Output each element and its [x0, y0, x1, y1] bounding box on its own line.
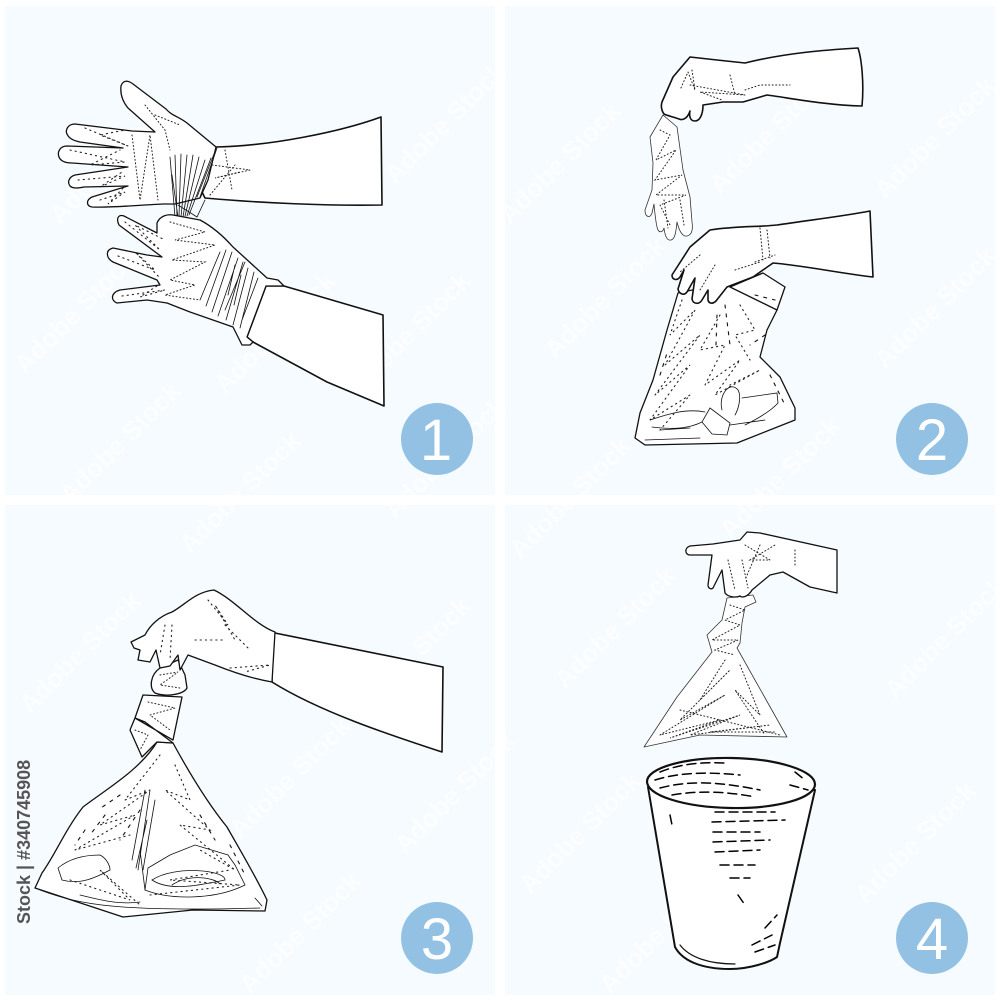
bag stipple	[70, 755, 240, 905]
lower glove hand	[107, 215, 284, 345]
illustration: step 1 gloved hands	[58, 81, 473, 475]
stock watermark pattern: Adobe Stock	[208, 265, 342, 399]
hanging glove	[645, 115, 692, 240]
stock watermark pattern: Adobe Stock	[703, 65, 837, 199]
step number 3 badge: 3	[421, 907, 453, 972]
stock watermark pattern: Adobe Stock	[378, 55, 512, 189]
arm	[270, 632, 443, 752]
knot stipple	[135, 702, 175, 750]
stock watermark pattern: Adobe Stock	[223, 710, 357, 844]
stock watermark pattern: Adobe Stock	[503, 430, 637, 564]
stock watermark pattern: Adobe Stock	[343, 590, 477, 724]
step number 1 badge: 1	[420, 408, 452, 473]
bucket	[647, 757, 815, 969]
bucket inside shading	[655, 763, 808, 797]
stretched glove cuff pleats	[170, 148, 217, 217]
step number 2 badge	[896, 403, 968, 475]
neck stipple	[160, 672, 180, 688]
top arm and hand	[661, 48, 863, 121]
bucket rim	[647, 757, 815, 809]
panel: step 1 background	[5, 6, 495, 495]
hand details	[160, 600, 270, 672]
bucket base line	[680, 945, 735, 964]
forearm stipple	[210, 150, 250, 195]
stock watermark pattern: Adobe Stock	[13, 585, 147, 719]
top hand details	[680, 70, 790, 100]
lower hand details	[680, 228, 775, 290]
panel: step 4 background	[505, 505, 995, 995]
bag stipple	[660, 605, 780, 738]
stock watermark pattern: Adobe Stock	[848, 775, 982, 909]
hanging glove stipple	[655, 130, 686, 228]
step number 4 badge: 4	[916, 907, 948, 972]
upper arm sleeve	[196, 117, 382, 205]
bag folds	[132, 790, 155, 890]
bag base line	[40, 890, 262, 909]
stock watermark pattern: Adobe Stock	[868, 70, 1000, 204]
lower arm and hand	[672, 211, 873, 303]
stock watermark pattern: Adobe Stock	[53, 375, 187, 509]
arm and hand with pointing finger	[686, 532, 837, 597]
upper glove hand	[58, 81, 216, 207]
bag short strokes	[660, 295, 785, 405]
stock watermark pattern: Adobe Stock	[513, 765, 647, 899]
step number 4 badge	[896, 902, 968, 974]
step number 3 badge	[401, 902, 473, 974]
stock watermark pattern: Adobe Stock	[538, 230, 672, 364]
stock watermark pattern: Adobe Stock	[43, 95, 177, 229]
hand	[131, 590, 275, 682]
stock watermark pattern: Adobe Stock	[593, 865, 727, 999]
illustration: step 2 hands and bag	[635, 48, 968, 475]
stock watermark pattern: Adobe Stock	[378, 390, 512, 524]
step number 1 badge	[401, 403, 473, 475]
bag	[635, 280, 795, 445]
palm stipple	[132, 105, 180, 200]
upper glove stipple	[70, 128, 128, 204]
step number 2 badge: 2	[916, 408, 948, 473]
stock watermark pattern: Adobe Stock	[343, 265, 477, 399]
gloves inside bag	[645, 387, 778, 440]
bag stipple	[650, 300, 760, 430]
bag cuff	[730, 273, 785, 310]
lower glove wrinkles	[200, 250, 258, 328]
panel: step 2 background	[505, 6, 995, 495]
bucket body	[648, 787, 815, 969]
stock watermark pattern: Adobe Stock	[713, 410, 847, 544]
bucket base shading	[752, 915, 777, 952]
bag twist knot	[130, 695, 182, 757]
bag	[644, 595, 787, 747]
stock watermark pattern: Adobe Stock	[173, 425, 307, 559]
bag body	[35, 742, 267, 917]
hand details	[728, 545, 795, 590]
stock watermark pattern: Adobe Stock	[8, 245, 142, 379]
bag gathered neck	[151, 660, 187, 695]
bucket body shading	[670, 812, 785, 905]
illustration: step 3 hand and tied bag	[35, 590, 473, 974]
lower arm sleeve	[247, 286, 384, 406]
lower glove palm stipple	[165, 222, 215, 300]
illustration: step 4 hand, bag and bucket	[644, 532, 968, 974]
stock watermark pattern: Adobe Stock	[388, 725, 522, 859]
stock watermark pattern: Adobe Stock	[868, 240, 1000, 374]
stock watermark pattern: Adobe Stock	[548, 560, 682, 694]
bag short strokes	[75, 795, 245, 875]
lower glove stipple	[118, 222, 165, 297]
panel: step 3 background	[5, 505, 495, 995]
stock watermark pattern: Adobe Stock	[233, 865, 367, 999]
stock image id vertical text: Stock | #340745908	[14, 760, 34, 924]
stock watermark pattern: Adobe Stock	[493, 95, 627, 229]
gloves inside bag	[58, 845, 245, 903]
